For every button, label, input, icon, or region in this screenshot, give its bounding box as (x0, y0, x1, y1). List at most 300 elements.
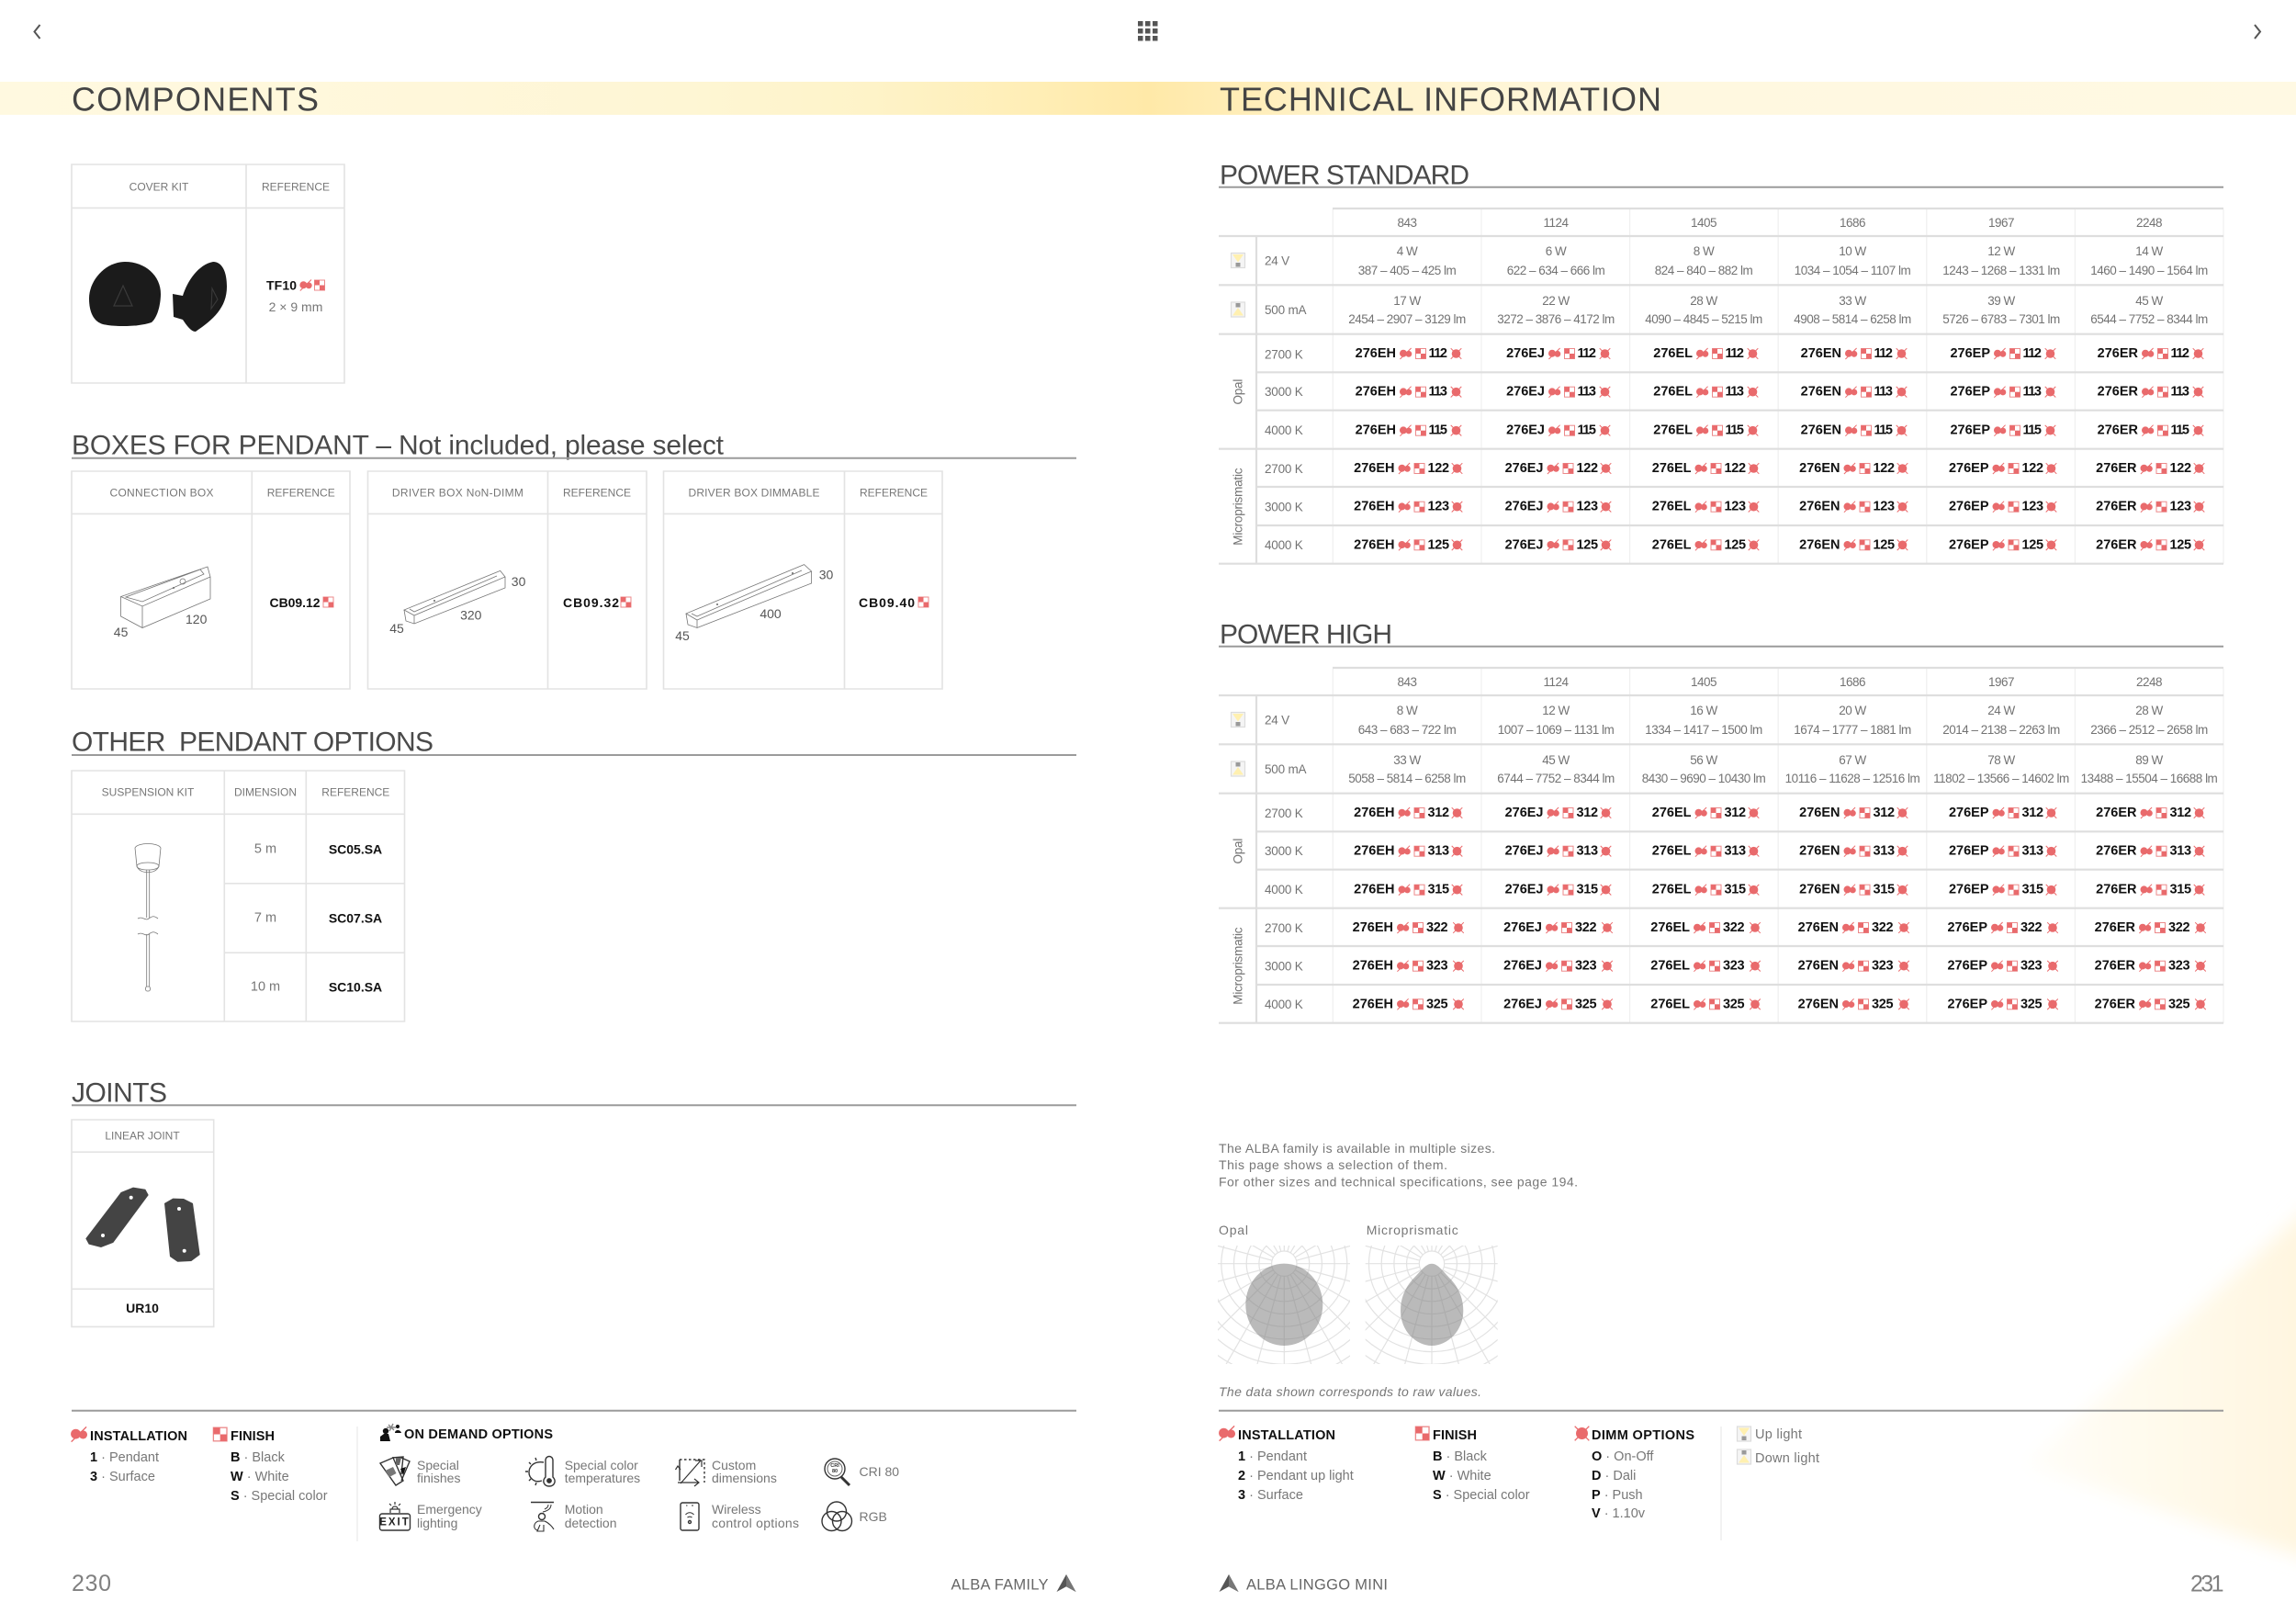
text block: availability note (1219, 1141, 1578, 1190)
row: 24 V up light: 16 W (1690, 704, 1718, 717)
row: 24 V up light: 1334 – 1417 – 1500 lm (1645, 723, 1762, 737)
drawing: driver box 400: 45 (675, 628, 690, 643)
row: 24 V up light: 1674 – 1777 – 1881 lm (1794, 723, 1911, 737)
row: 24 V up light: 1034 – 1054 – 1107 lm (1795, 264, 1911, 277)
row group: opal: 4000 K (1265, 423, 1303, 437)
legend: dimm options (1575, 1427, 1694, 1521)
chart: opal polar diagram (1082, 1062, 1486, 1466)
header row: lengths: 1124 (1543, 675, 1570, 689)
legend: on demand options: RGB (860, 1509, 887, 1524)
row group: microprismatic (1231, 920, 2206, 1011)
row group: microprismatic: 325 (2020, 997, 2043, 1011)
row group: microprismatic: 276EP (1949, 537, 1989, 552)
row: 24 V up light: 14 W (2135, 244, 2164, 258)
icon: installation (71, 1427, 87, 1442)
row group: microprismatic: 276ER (2096, 461, 2137, 476)
legend: finish: B · Black (1433, 1449, 1488, 1464)
text: raw values note: The data shown corresponds to raw values. (1219, 1384, 1481, 1399)
row: 24 V up light (1231, 244, 2208, 277)
row group: microprismatic: 276EP (1947, 920, 1987, 935)
drawing: driver box 320: 45 (389, 621, 404, 636)
row group: opal: 313 (1576, 844, 1598, 859)
title: components: COMPONENTS (72, 81, 319, 118)
row group: microprismatic: 276EP (1947, 997, 1987, 1011)
header row: lengths: 1405 (1691, 675, 1716, 689)
drawing: driver box 400 (675, 565, 833, 643)
panel: driver box dimmable: REFERENCE (860, 487, 928, 500)
row group: microprismatic: 276EN (1799, 537, 1840, 552)
row group: microprismatic: 323 (1872, 959, 1894, 974)
row group: microprismatic: 322 (1575, 920, 1597, 935)
row group: opal: 2700 K (1265, 806, 1303, 820)
row group: opal: 276EH (1354, 806, 1394, 820)
row group: microprismatic: 276EL (1652, 537, 1692, 552)
row group: opal: 313 (2169, 844, 2191, 859)
panel: connection box (72, 471, 350, 689)
icon: emergency exit (379, 1502, 411, 1530)
row group: microprismatic: 323 (2168, 959, 2190, 974)
row group: opal: 276EP (1949, 806, 1989, 820)
panel: driver box non-dimm: REFERENCE (563, 487, 631, 500)
row group: opal: 312 (1576, 806, 1598, 820)
footer label: ALBA LINGGO MINI: ALBA LINGGO MINI (1246, 1576, 1388, 1593)
row group: opal: 276EJ (1506, 346, 1545, 361)
row: 24 V up light: 1243 – 1268 – 1331 lm (1942, 264, 2060, 277)
row group: opal: 313 (1427, 844, 1449, 859)
row group: opal: 276EH (1356, 385, 1396, 400)
header row: lengths: 1686 (1840, 675, 1865, 689)
row group: microprismatic: 322 (2020, 920, 2043, 935)
row group: opal: 276EL (1652, 883, 1692, 897)
drawing: driver box 320 (389, 570, 526, 636)
row group: opal: 276ER (2098, 385, 2139, 400)
row group: opal: 315 (2169, 883, 2191, 897)
row group: opal: 313 (1874, 844, 1895, 859)
row group: opal: Opal (1231, 839, 1245, 864)
row group: opal: 113 (1578, 385, 1596, 400)
row group: opal: 276EN (1799, 883, 1840, 897)
row group: microprismatic: 276EH (1354, 500, 1394, 514)
title: technical information: TECHNICAL INFORMATION (1220, 81, 1661, 118)
row group: opal: 312 (1874, 806, 1895, 820)
reference: CB09.32: CB09.32 (563, 595, 619, 610)
row group: microprismatic: 322 (1723, 920, 1745, 935)
icon: special color temperatures (525, 1457, 555, 1486)
legend: dimm options: O · On-Off (1592, 1449, 1654, 1464)
drawing: driver box 400: 30 (819, 567, 833, 581)
row: 24 V up light: 643 – 683 – 722 lm (1358, 723, 1457, 737)
header row: lengths: 2248 (2136, 216, 2162, 230)
row: 24 V up light: 24 W (1987, 704, 2016, 717)
row group: microprismatic: 276EL (1650, 959, 1690, 974)
row group: opal: 313 (1725, 844, 1746, 859)
heading: boxes for pendant: BOXES FOR PENDANT – Not included, please select (72, 430, 725, 461)
legend: finish: FINISH (1433, 1428, 1477, 1443)
row group: microprismatic: 323 (2020, 959, 2043, 974)
row group: microprismatic: 125 (1576, 537, 1598, 552)
row group: microprismatic: 276ER (2096, 500, 2137, 514)
legend: finish: S · Special color (231, 1489, 328, 1504)
panel: linear joint (72, 1120, 214, 1326)
row group: microprismatic: 325 (1723, 997, 1745, 1011)
row group: microprismatic: 322 (2168, 920, 2190, 935)
row: 24 V up light: 622 – 634 – 666 lm (1507, 264, 1605, 277)
legend: on demand options: finishes (417, 1471, 460, 1485)
row group: opal: 276EL (1652, 844, 1692, 859)
row group: microprismatic: Microprismatic (1231, 927, 1245, 1005)
legend: installation: INSTALLATION (1238, 1428, 1335, 1443)
row group: microprismatic: 276EJ (1503, 920, 1542, 935)
row: 24 V up light: 1007 – 1069 – 1131 lm (1498, 723, 1615, 737)
row: 500 mA down light: 22 W (1542, 294, 1570, 308)
row: 500 mA down light: 13488 – 15504 – 16688 lm (2081, 772, 2218, 785)
legend: finish (1415, 1427, 1530, 1503)
row: 500 mA down light: 33 W (1839, 294, 1867, 308)
background glow: bottom right (2025, 1194, 2296, 1563)
row: 500 mA down light: 56 W (1690, 753, 1718, 767)
row: 24 V up light: 2014 – 2138 – 2263 lm (1942, 723, 2060, 737)
legend: finish: FINISH (231, 1429, 275, 1444)
row group: microprismatic: 276EH (1354, 537, 1394, 552)
row group: microprismatic: 323 (1723, 959, 1745, 974)
panel: cover kit: COVER KIT (129, 181, 189, 194)
row group: microprismatic: 276EN (1798, 920, 1839, 935)
row: 7 m: SC07.SA (329, 911, 382, 926)
legend: on demand options: Special (417, 1458, 459, 1472)
row group: opal: 276EL (1653, 423, 1693, 438)
row group: opal: 276EP (1950, 346, 1990, 361)
row group: microprismatic: 2700 K (1265, 462, 1303, 476)
row: 500 mA down light: 5726 – 6783 – 7301 lm (1942, 312, 2060, 326)
legend: on demand options: control options (712, 1516, 799, 1530)
table: power high (1219, 668, 2223, 1023)
legend: dimm options: DIMM OPTIONS (1592, 1428, 1694, 1443)
row group: microprismatic: 122 (1427, 461, 1449, 476)
row group: opal: 112 (1725, 346, 1744, 361)
reference: TF10 (266, 278, 325, 314)
heading: other pendant options: OTHER PENDANT OPTIONS (72, 727, 433, 757)
heading: joints: JOINTS (72, 1078, 167, 1108)
row: 500 mA down light: 78 W (1987, 753, 2016, 767)
row group: microprismatic: 125 (1874, 537, 1895, 552)
icon: dimm (1575, 1427, 1589, 1440)
row: 24 V up light: 24 V (1265, 254, 1289, 268)
row group: microprismatic: 323 (1575, 959, 1597, 974)
row: 24 V up light: 387 – 405 – 425 lm (1358, 264, 1457, 277)
legend: dimm options: P · Push (1592, 1488, 1643, 1503)
drawing: driver box 400: 400 (760, 606, 782, 621)
heading: power high: POWER HIGH (1220, 619, 1392, 650)
icon: CRI 80: 80 (832, 1469, 838, 1474)
row group: microprismatic: 123 (1427, 500, 1449, 514)
legend: installation: 1 · Pendant (1238, 1449, 1307, 1464)
reference: CB09.12: CB09.12 (270, 595, 321, 610)
page number 231: 231 (2190, 1571, 2224, 1596)
row group: microprismatic: 276EH (1353, 920, 1393, 935)
row: 5 m: SC05.SA (329, 842, 382, 857)
row group: opal: 115 (2171, 423, 2189, 438)
header band (0, 82, 2296, 115)
row: 24 V up light: 28 W (2135, 704, 2164, 717)
table: power standard (1219, 209, 2223, 564)
icon: custom dimensions (676, 1460, 704, 1486)
row group: microprismatic: 3000 K (1265, 959, 1303, 974)
legend: installation (71, 1427, 187, 1484)
row group: opal: 315 (2022, 883, 2043, 897)
row group: opal: 115 (1429, 423, 1447, 438)
row group: microprismatic: Microprismatic (1231, 468, 1245, 546)
panel: driver box non-dimm: DRIVER BOX NoN-DIMM (392, 487, 523, 500)
row group: opal: 315 (1874, 883, 1895, 897)
legend: on demand options: Custom (712, 1458, 756, 1472)
text block: availability note: The ALBA family is available in multiple sizes. (1219, 1141, 1495, 1156)
legend: on demand options: temperatures (565, 1471, 640, 1485)
row group: microprismatic: 276EL (1652, 500, 1692, 514)
panel: connection box: REFERENCE (267, 487, 335, 500)
row group: microprismatic: 276ER (2096, 537, 2137, 552)
icon: CRI 80 (825, 1459, 850, 1485)
drawing: driver box 320: 30 (512, 574, 526, 589)
row group: microprismatic: 276EH (1353, 959, 1393, 974)
row group: microprismatic: 123 (2022, 500, 2043, 514)
row: 5 m: 5 m (254, 842, 276, 857)
panel: linear joint: UR10 (126, 1301, 159, 1315)
row group: microprismatic: 276EN (1798, 959, 1839, 974)
row: 10 m: SC10.SA (329, 980, 382, 995)
row group: opal: 276ER (2098, 346, 2139, 361)
row: 500 mA down light: 28 W (1690, 294, 1718, 308)
legend: installation: 3 · Surface (90, 1470, 155, 1484)
row: 500 mA down light: 45 W (2135, 294, 2164, 308)
legend: light direction: Up light (1755, 1427, 1802, 1442)
row group: opal: 312 (1725, 806, 1746, 820)
row: 500 mA down light: 500 mA (1265, 303, 1307, 317)
footer label: ALBA FAMILY: ALBA FAMILY (951, 1577, 1049, 1594)
row group: microprismatic: 276EL (1652, 461, 1692, 476)
row: 24 V up light: 20 W (1839, 704, 1867, 717)
row: 500 mA down light: 45 W (1542, 753, 1570, 767)
row: 500 mA down light: 6544 – 7752 – 8344 lm (2090, 312, 2208, 326)
icon: RGB (822, 1502, 852, 1530)
panel: suspension kit: SUSPENSION KIT (102, 786, 195, 799)
row: 24 V up light: 8 W (1397, 704, 1418, 717)
row group: opal: 276ER (2098, 423, 2139, 438)
row: 5 m (254, 842, 382, 857)
row group: opal: 315 (1427, 883, 1449, 897)
image: cover kit caps (89, 262, 227, 332)
icon: wireless control (681, 1503, 699, 1530)
legend: on demand options: detection (565, 1516, 617, 1530)
row: 500 mA down light: 6744 – 7752 – 8344 lm (1497, 772, 1615, 785)
row group: opal: 112 (1874, 346, 1893, 361)
legend: finish: W · White (1433, 1469, 1491, 1483)
row group: opal: 276EN (1801, 385, 1841, 400)
row: 24 V up light: 10 W (1839, 244, 1867, 258)
legend: installation: 2 · Pendant up light (1238, 1469, 1354, 1483)
row group: microprismatic: 276EP (1947, 959, 1987, 974)
row: 10 m (251, 980, 382, 995)
row: 24 V up light: 4 W (1397, 244, 1418, 258)
legend: light direction: Down light (1755, 1451, 1819, 1466)
header row: lengths: 1405 (1691, 216, 1716, 230)
row group: opal: 312 (1427, 806, 1449, 820)
row group: microprismatic: 122 (1725, 461, 1746, 476)
header row: lengths: 1967 (1988, 675, 2014, 689)
row group: microprismatic: 125 (2022, 537, 2043, 552)
row group: microprismatic: 276EL (1650, 997, 1690, 1011)
icon: emergency exit: EXIT (379, 1517, 411, 1528)
chart: microprismatic polar diagram: Microprismatic (1367, 1223, 1458, 1237)
icon: installation (1219, 1426, 1235, 1441)
row group: opal: 3000 K (1265, 844, 1303, 858)
left footer rule (72, 1410, 1076, 1412)
footer label: ALBA FAMILY (951, 1574, 1076, 1594)
row group: opal (1231, 346, 2203, 438)
row group: opal: 313 (2022, 844, 2043, 859)
header row: lengths: 843 (1397, 675, 1417, 689)
row group: microprismatic: 122 (2169, 461, 2191, 476)
row group: microprismatic: 276EP (1949, 461, 1989, 476)
panel: suspension kit (72, 771, 404, 1021)
row group: microprismatic: 4000 K (1265, 998, 1303, 1011)
icon: finish (1415, 1427, 1429, 1440)
row: 500 mA down light: 67 W (1839, 753, 1867, 767)
row: 24 V up light: 12 W (1542, 704, 1570, 717)
heading: power standard: POWER STANDARD (1220, 160, 1469, 191)
legend: finish: W · White (231, 1470, 289, 1484)
row group: microprismatic: 325 (1872, 997, 1894, 1011)
row group: opal: 276EJ (1505, 883, 1543, 897)
text block: availability note: For other sizes and technical specifications, see page 194. (1219, 1175, 1578, 1190)
row group: opal: 276EH (1356, 346, 1396, 361)
row group: microprismatic: 4000 K (1265, 538, 1303, 552)
reference: TF10: 2 × 9 mm (269, 299, 322, 314)
drawing: connection box: 45 (114, 625, 129, 639)
row: 500 mA down light: 33 W (1393, 753, 1422, 767)
row group: microprismatic: 125 (1427, 537, 1449, 552)
row group: opal: 315 (1725, 883, 1746, 897)
row group: opal: 276EP (1949, 844, 1989, 859)
row group: microprismatic: 276ER (2095, 997, 2136, 1011)
row group: microprismatic: 123 (2169, 500, 2191, 514)
row group: microprismatic: 322 (1426, 920, 1448, 935)
legend: on demand options (379, 1424, 899, 1531)
row group: microprismatic: 276EJ (1503, 959, 1542, 974)
header row: lengths: 1967 (1988, 216, 2014, 230)
header row: lengths: 1686 (1840, 216, 1865, 230)
panel: driver box dimmable (663, 471, 942, 689)
row group: opal: 113 (2022, 385, 2042, 400)
row group: opal: 276EN (1801, 423, 1841, 438)
row group: opal: 112 (1429, 346, 1447, 361)
row: 500 mA down light: 17 W (1393, 294, 1422, 308)
row: 500 mA down light (1231, 294, 2208, 326)
row: 24 V up light (1231, 704, 2208, 737)
row group: opal: 276EP (1949, 883, 1989, 897)
drawing: suspension kit (135, 843, 161, 991)
legend: light direction (1738, 1427, 1819, 1466)
row group: opal: 315 (1576, 883, 1598, 897)
row group: opal: 276EH (1354, 844, 1394, 859)
row: 24 V up light: 2366 – 2512 – 2658 lm (2090, 723, 2208, 737)
row group: microprismatic: 276EJ (1505, 537, 1543, 552)
row group: microprismatic: 123 (1874, 500, 1895, 514)
row: 24 V up light: 1460 – 1490 – 1564 lm (2090, 264, 2208, 277)
row group: microprismatic: 276EN (1799, 500, 1840, 514)
row group: microprismatic: 276ER (2095, 959, 2136, 974)
row group: microprismatic: 2700 K (1265, 921, 1303, 935)
row group: microprismatic (1231, 461, 2204, 552)
row group: opal: 276EJ (1506, 385, 1545, 400)
row group: microprismatic: 3000 K (1265, 500, 1303, 514)
header row: lengths (1397, 216, 2162, 230)
row group: opal: 115 (1578, 423, 1596, 438)
row: 7 m (254, 911, 382, 926)
chart: opal polar diagram: Opal (1219, 1223, 1248, 1237)
legend: on demand options: ON DEMAND OPTIONS (404, 1427, 553, 1442)
icon: special finishes (380, 1457, 410, 1485)
row: 24 V up light: 6 W (1546, 244, 1567, 258)
row group: opal: 276EL (1652, 806, 1692, 820)
navigation: back chevron (35, 25, 40, 39)
row group: microprismatic: 325 (2168, 997, 2190, 1011)
legend: dimm options: V · 1.10v (1592, 1506, 1646, 1521)
row group: opal: 4000 K (1265, 883, 1303, 897)
row: 500 mA down light: 89 W (2135, 753, 2164, 767)
row group: opal: 276EJ (1505, 806, 1543, 820)
row: 24 V up light: 12 W (1987, 244, 2016, 258)
row group: opal: 276EN (1799, 844, 1840, 859)
panel: cover kit: REFERENCE (262, 181, 330, 194)
row group: opal: 276EJ (1506, 423, 1545, 438)
panel: driver box dimmable: DRIVER BOX DIMMABLE (689, 487, 819, 500)
row: 500 mA down light: 5058 – 5814 – 6258 lm (1348, 772, 1466, 785)
row group: microprismatic: 276EJ (1505, 500, 1543, 514)
row group: opal: 3000 K (1265, 385, 1303, 399)
row group: microprismatic: 276EJ (1503, 997, 1542, 1011)
icon: motion detection (531, 1503, 554, 1531)
panel: suspension kit: REFERENCE (321, 786, 389, 799)
legend: finish (213, 1427, 328, 1504)
header row: lengths: 843 (1397, 216, 1417, 230)
page number 230: 230 (72, 1571, 111, 1596)
drawing: connection box: 120 (186, 612, 208, 626)
icon: on demand (380, 1424, 401, 1441)
row group: opal: 112 (2171, 346, 2189, 361)
row group: microprismatic: 276EL (1650, 920, 1690, 935)
row group: opal: 276EH (1354, 883, 1394, 897)
row: 7 m: 7 m (254, 911, 276, 926)
row group: opal: 115 (1725, 423, 1744, 438)
row group: microprismatic: 123 (1576, 500, 1598, 514)
legend: on demand options: Special color (565, 1458, 638, 1472)
chart: microprismatic polar diagram (1230, 1062, 1634, 1466)
legend: on demand options: Emergency (417, 1502, 482, 1517)
reference: TF10: TF10 (266, 278, 297, 293)
row: 24 V up light: 8 W (1694, 244, 1715, 258)
row group: opal: 113 (1725, 385, 1744, 400)
row group: opal: 113 (1874, 385, 1893, 400)
row group: microprismatic: 122 (2022, 461, 2043, 476)
row group: opal: 113 (2171, 385, 2189, 400)
legend: finish: B · Black (231, 1450, 286, 1465)
row: 500 mA down light: 3272 – 3876 – 4172 lm (1497, 312, 1615, 326)
row group: opal: 112 (1578, 346, 1596, 361)
row group: microprismatic: 276EJ (1505, 461, 1543, 476)
legend: on demand options: dimensions (712, 1471, 777, 1485)
row group: opal: 276EL (1653, 385, 1693, 400)
right footer rule (1219, 1410, 2223, 1412)
